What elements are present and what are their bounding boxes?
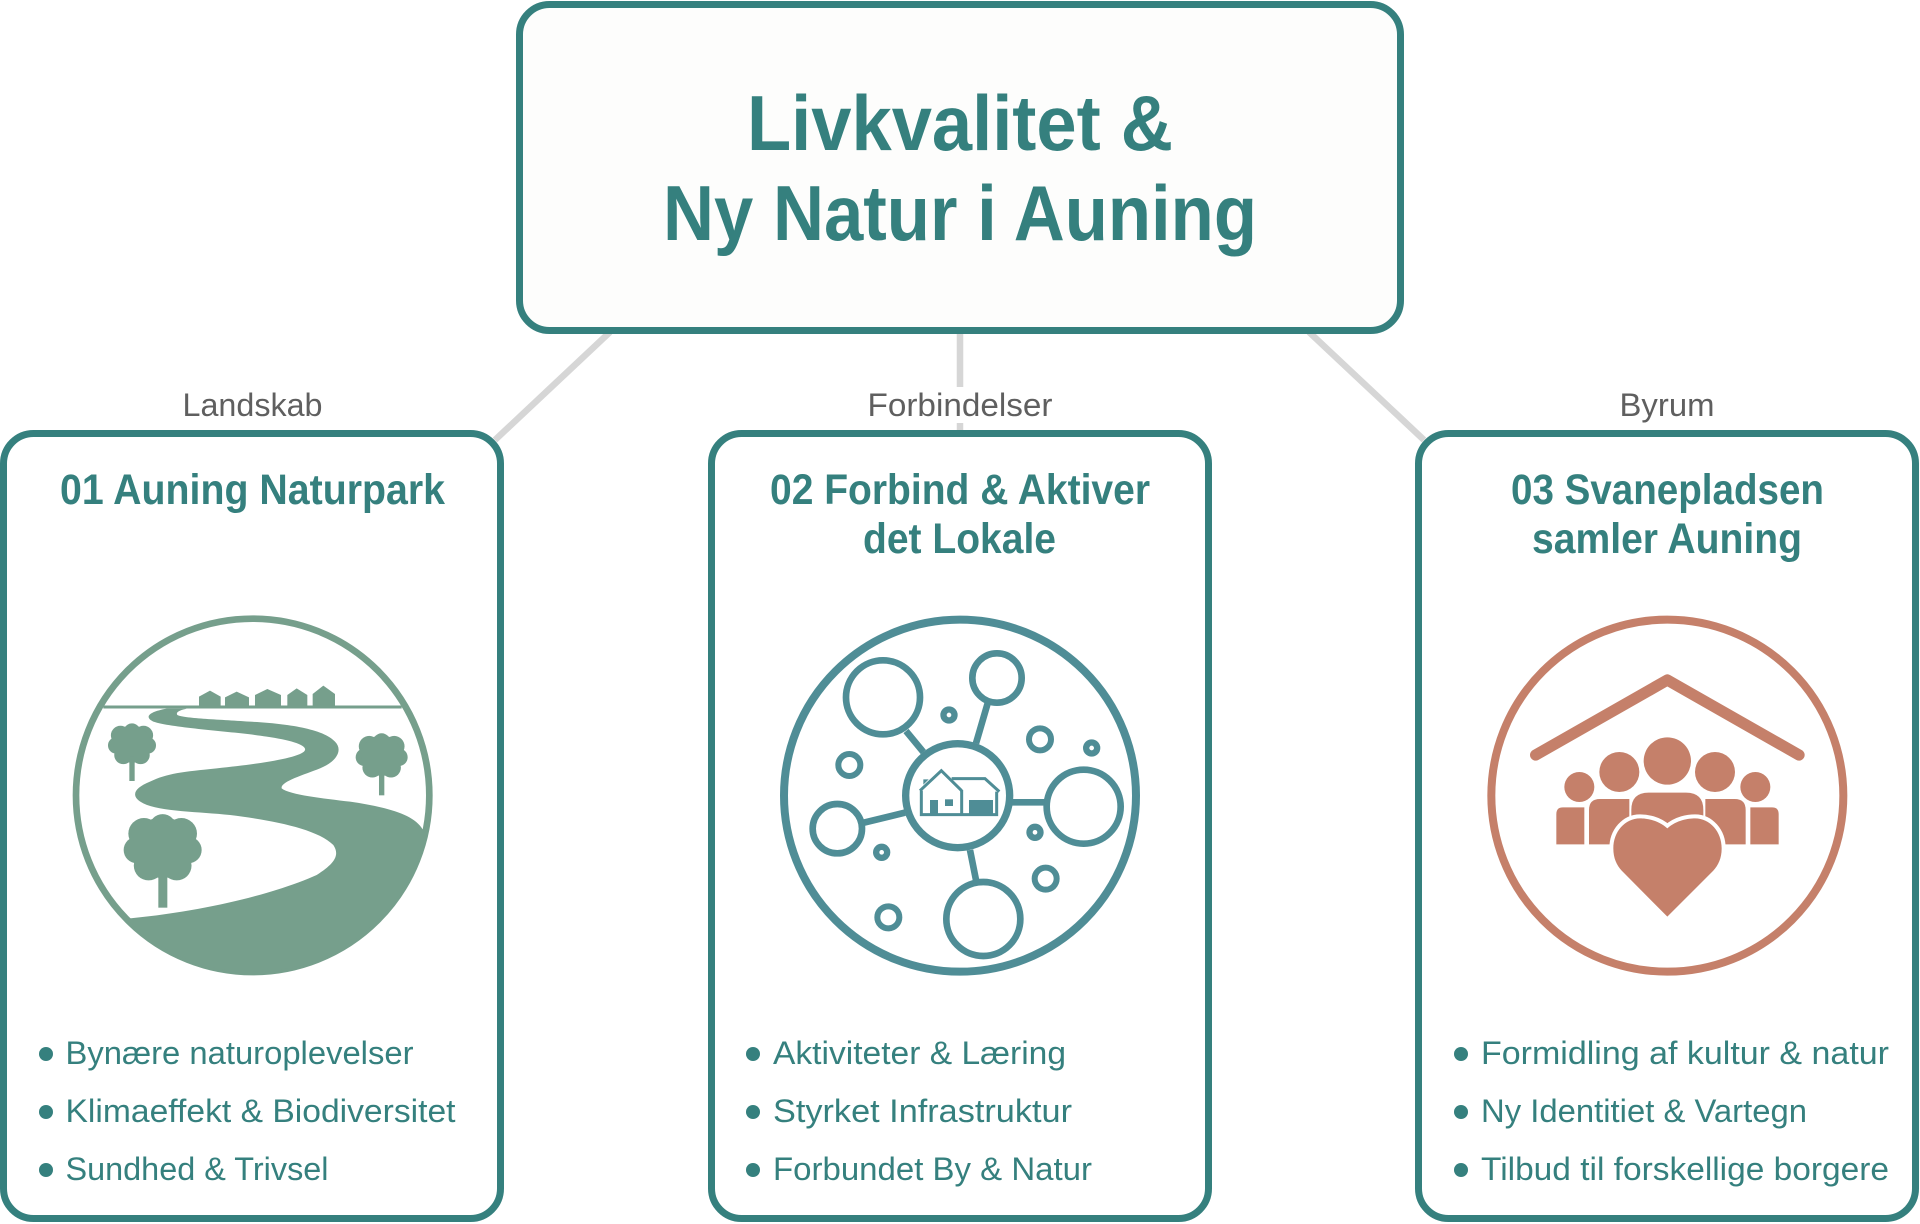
heading bbox=[770, 466, 1150, 563]
category label: Forbindelser: Forbindelser bbox=[868, 387, 1053, 423]
heading: 02 Forbind & Aktiver bbox=[770, 466, 1150, 514]
bullet list bbox=[1454, 1035, 1889, 1187]
heading: 03 Svanepladsen bbox=[1511, 466, 1824, 514]
panel: 01 Auning Naturpark bbox=[4, 434, 500, 1218]
title text bbox=[663, 79, 1257, 257]
bullet list: Forbundet By & Natur bbox=[773, 1151, 1092, 1187]
bullet list: Ny Identitiet & Vartegn bbox=[1481, 1093, 1807, 1129]
bullet list: Klimaeffekt & Biodiversitet bbox=[66, 1093, 456, 1129]
icon: landscape with river bbox=[76, 619, 429, 972]
category label: Landskab: Landskab bbox=[182, 387, 322, 423]
bullet list: Sundhed & Trivsel bbox=[66, 1151, 328, 1187]
bullet list bbox=[39, 1035, 456, 1187]
bullet list: Bynære naturoplevelser bbox=[66, 1035, 414, 1071]
bullet list: Aktiviteter & Læring bbox=[773, 1035, 1066, 1071]
heading: 01 Auning Naturpark bbox=[60, 466, 445, 514]
panel: 03 Svanepladsen samler Auning bbox=[1418, 434, 1916, 1218]
connector lines bbox=[495, 332, 1424, 440]
heading: det Lokale bbox=[863, 515, 1056, 563]
bullet list bbox=[746, 1035, 1092, 1187]
heading bbox=[1511, 466, 1824, 563]
panel: 02 Forbind & Aktiver det Lokale bbox=[712, 434, 1208, 1218]
title text: Ny Natur i Auning bbox=[663, 169, 1257, 257]
bullet list: Styrket Infrastruktur bbox=[773, 1093, 1072, 1129]
title box bbox=[520, 4, 1400, 330]
bullet list: Tilbud til forskellige borgere bbox=[1481, 1151, 1889, 1187]
icon: people under roof with heart bbox=[1491, 620, 1843, 972]
heading: samler Auning bbox=[1532, 515, 1802, 563]
title text: Livkvalitet & bbox=[747, 79, 1173, 167]
category label: Byrum: Byrum bbox=[1620, 387, 1714, 423]
icon: house bbox=[920, 771, 999, 815]
icon: connected network bbox=[784, 620, 1136, 972]
bullet list: Formidling af kultur & natur bbox=[1481, 1035, 1889, 1071]
